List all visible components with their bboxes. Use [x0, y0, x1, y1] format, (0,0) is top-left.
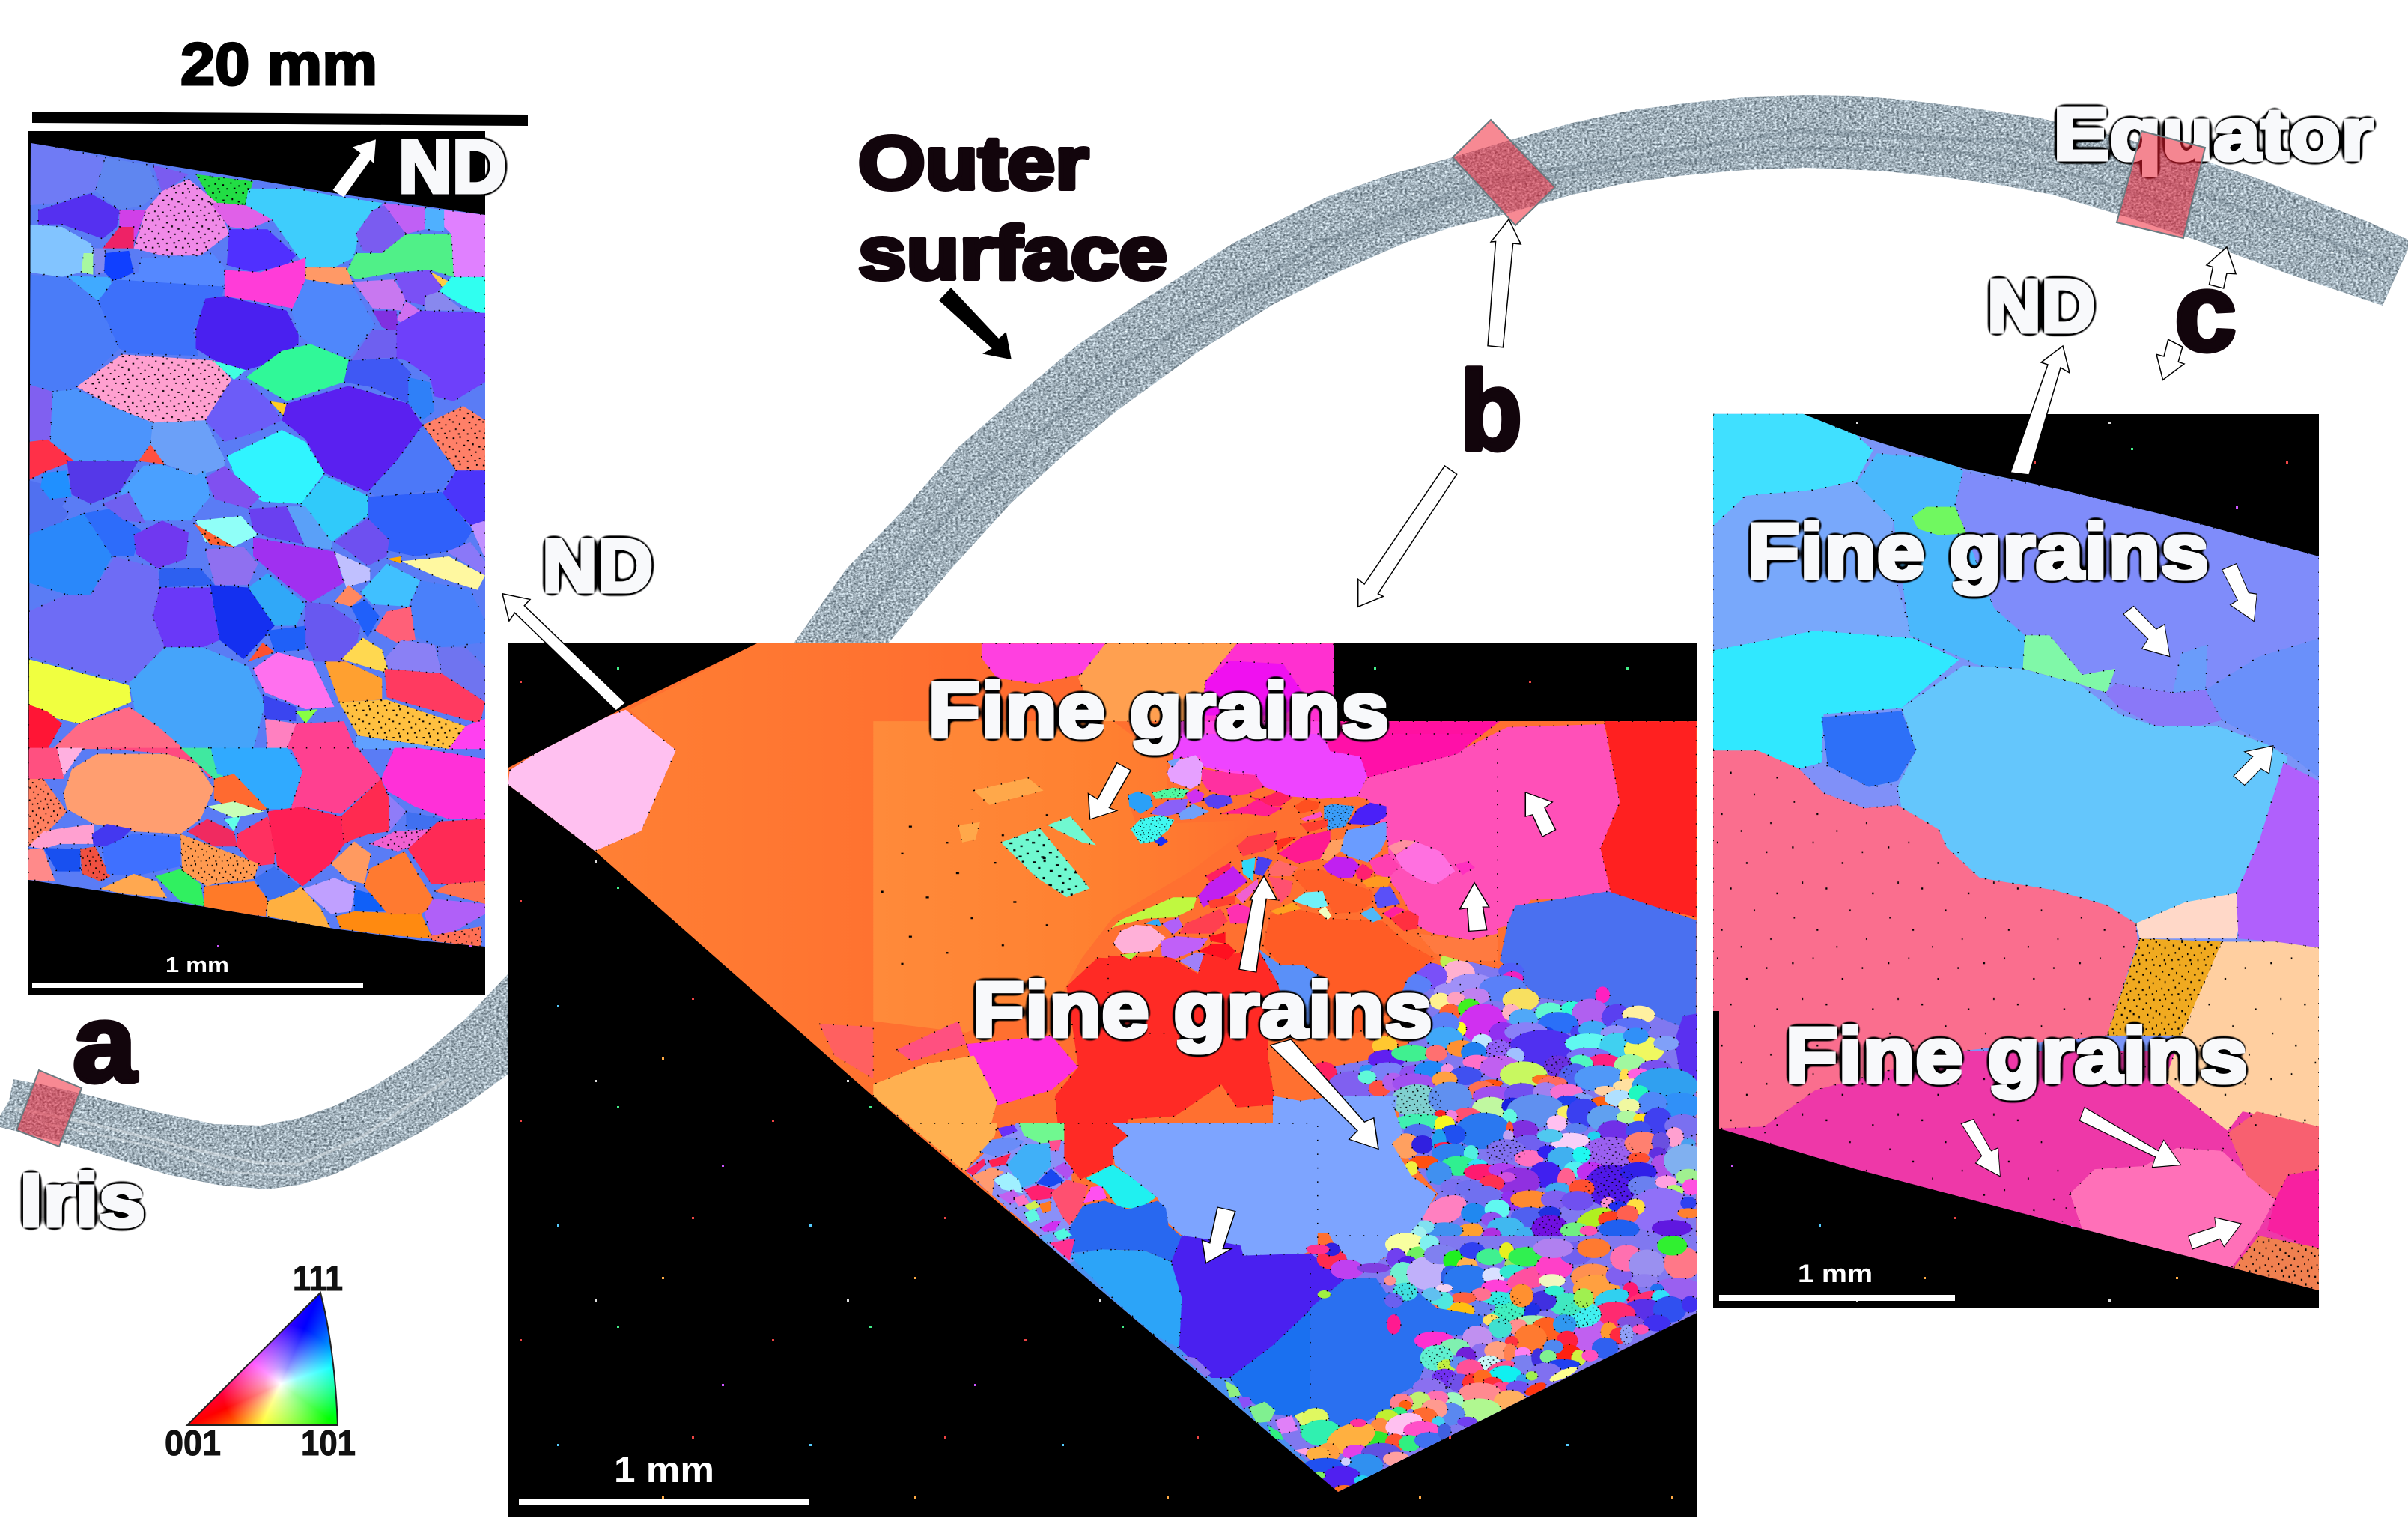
panel b lower left grains: [907, 1123, 1318, 1460]
panel c sparse speckle: [1713, 750, 2319, 1218]
arrow: c down to panel: [2156, 339, 2184, 380]
panel a dotted grain speckle: [76, 174, 485, 749]
panel b central grains: [1108, 734, 1498, 1033]
panel b scale bar: 1 mm: [614, 1451, 714, 1490]
region marker c: [2117, 131, 2205, 238]
panel a scale bar: [32, 953, 363, 988]
panel b dotted bottom grains: [1393, 1283, 1633, 1387]
curved cross-section strip: [0, 95, 2408, 1189]
panel b lower diagonal underlay: [1033, 1228, 1348, 1498]
arrow: ND panel a: [333, 139, 376, 197]
scale heading: 20 mm: 20 mm: [180, 31, 377, 97]
heading: Outer surface: Outer: [858, 121, 1089, 205]
label: ND middle: ND: [542, 524, 653, 608]
inverse pole figure legend: 111: [293, 1258, 343, 1298]
label: Fine grains panel b lower: Fine grains: [972, 967, 1432, 1054]
panel c arrows: [1961, 564, 2273, 1249]
panel b speckle in orange grain: [881, 809, 1064, 965]
panel b mint grain speckle: [1009, 830, 1087, 896]
inverse pole figure legend: 001: [165, 1423, 221, 1463]
heading: Outer surface: [858, 121, 1167, 295]
panel b fine grains bottom tip: [1301, 1233, 1703, 1493]
panel a upper grains: [28, 141, 485, 749]
label: Fine grains panel c upper: Fine grains: [1747, 509, 2209, 595]
panel c: grain map: [1713, 414, 2319, 1308]
arrow: ND to panel b: [502, 594, 626, 711]
label: a: a: [73, 982, 138, 1105]
label: Fine grains panel b upper: Fine grains: [928, 667, 1389, 754]
panel b fine grains right cluster: [1273, 951, 1708, 1263]
20 mm scale bar: [32, 112, 528, 126]
arrow: c up to strip: [2207, 247, 2236, 288]
panel c dotted grain speckle: [2107, 938, 2319, 1293]
label: ND panel a: ND: [398, 125, 506, 209]
panel c grains: [1713, 414, 2319, 1293]
panel a scale bar: 1 mm: [165, 953, 229, 977]
panel b: grain map: [508, 643, 1708, 1517]
inverse pole figure legend: 101: [301, 1423, 356, 1463]
panel a lower grains: [28, 748, 485, 947]
label: Equator: Equator: [2053, 93, 2374, 175]
label: b: b: [1460, 347, 1522, 473]
label: c: c: [2174, 251, 2237, 374]
panel b scale bar: [519, 1451, 809, 1505]
panel c scale bar: 1 mm: [1798, 1260, 1873, 1288]
panel b dotted fine grains: [1391, 1039, 1637, 1242]
panel b central dotted grains: [1131, 788, 1355, 844]
label: Fine grains panel c lower: Fine grains: [1785, 1013, 2248, 1099]
arrow: ND to panel c: [2010, 346, 2070, 475]
region marker a: [16, 1070, 82, 1147]
heading: Outer surface: surface: [858, 211, 1167, 295]
panel c black notch: [1713, 1011, 1719, 1131]
label: ND right: ND: [1987, 264, 2095, 348]
arrow: b down to panel: [1358, 466, 1457, 607]
panel a: grain map: [28, 131, 485, 995]
panel b arrows: [1088, 763, 1556, 1263]
arrow: b up to strip: [1488, 219, 1521, 347]
region marker b: [1453, 120, 1555, 225]
arrow: outer surface: [939, 288, 1012, 359]
panel c scale bar: [1719, 1260, 1955, 1301]
label: Iris: Iris: [19, 1159, 145, 1242]
panel a lower dotted grain speckle: [28, 779, 481, 947]
inverse pole figure legend: [165, 1258, 356, 1463]
panel b coarse grains left and top: [508, 643, 1697, 1492]
